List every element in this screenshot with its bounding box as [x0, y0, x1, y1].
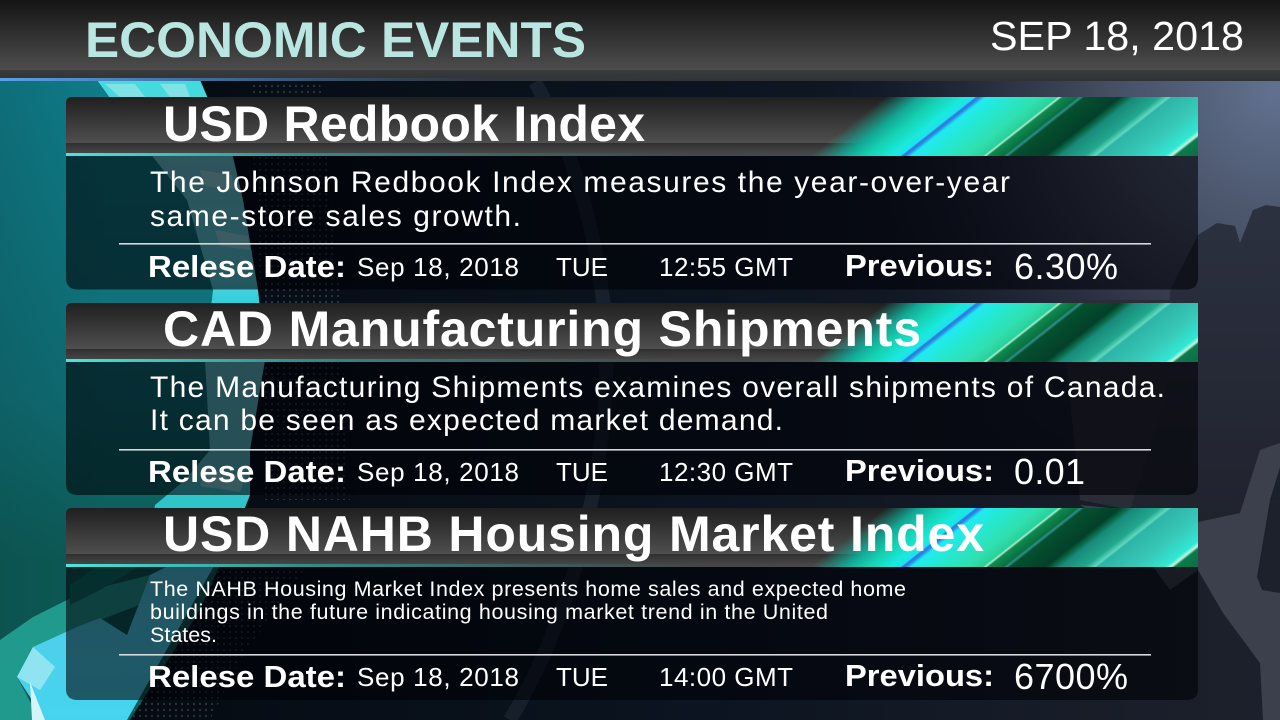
- release info: 6700%: [1014, 656, 1128, 697]
- release info: 0.01: [1014, 451, 1085, 492]
- release info: Relese Date:: [148, 249, 346, 284]
- description: The Johnson Redbook Index measures the year-over-year: [150, 166, 1010, 199]
- release info: [148, 656, 1128, 697]
- panel: USD Redbook Index: [66, 96, 1198, 290]
- release info: Relese Date:: [148, 454, 346, 489]
- release info: Sep 18, 2018: [357, 457, 519, 487]
- top banner: [0, 0, 1280, 81]
- release info: Previous:: [845, 658, 994, 693]
- release info: Sep 18, 2018: [357, 252, 519, 282]
- release info: 14:00 GMT: [659, 662, 793, 692]
- release info: [148, 451, 1085, 492]
- header bar: [66, 97, 1198, 156]
- release info: Previous:: [845, 453, 994, 488]
- description: The Manufacturing Shipments examines overall shipments of Canada.: [150, 371, 1165, 404]
- release info: TUE: [556, 457, 608, 487]
- description: same-store sales growth.: [150, 200, 521, 233]
- description: States.: [150, 623, 217, 647]
- release info: Sep 18, 2018: [357, 662, 519, 692]
- release info: 12:30 GMT: [659, 457, 793, 487]
- release info: 6.30%: [1014, 246, 1118, 287]
- panel: USD NAHB Housing Market Index: [66, 506, 1198, 700]
- description: [150, 371, 1165, 437]
- release info: TUE: [556, 662, 608, 692]
- release info: TUE: [556, 252, 608, 282]
- release info: Previous:: [845, 248, 994, 283]
- description: buildings in the future indicating housing market trend in the United: [150, 600, 828, 624]
- release info: [148, 246, 1118, 287]
- panel: CAD Manufacturing Shipments: [66, 301, 1198, 495]
- release info: 12:55 GMT: [659, 252, 793, 282]
- header bar: [66, 303, 1198, 362]
- header bar: [66, 508, 1198, 567]
- description: The NAHB Housing Market Index presents home sales and expected home: [150, 577, 906, 601]
- heading: CAD Manufacturing Shipments: [163, 301, 921, 357]
- description: It can be seen as expected market demand.: [150, 404, 783, 437]
- description: [150, 166, 1010, 233]
- date: SEP 18, 2018: [990, 13, 1244, 59]
- description: [150, 577, 906, 647]
- heading: USD NAHB Housing Market Index: [163, 506, 984, 562]
- release info: Relese Date:: [148, 659, 346, 694]
- heading: USD Redbook Index: [163, 96, 645, 152]
- title: ECONOMIC EVENTS: [85, 12, 586, 68]
